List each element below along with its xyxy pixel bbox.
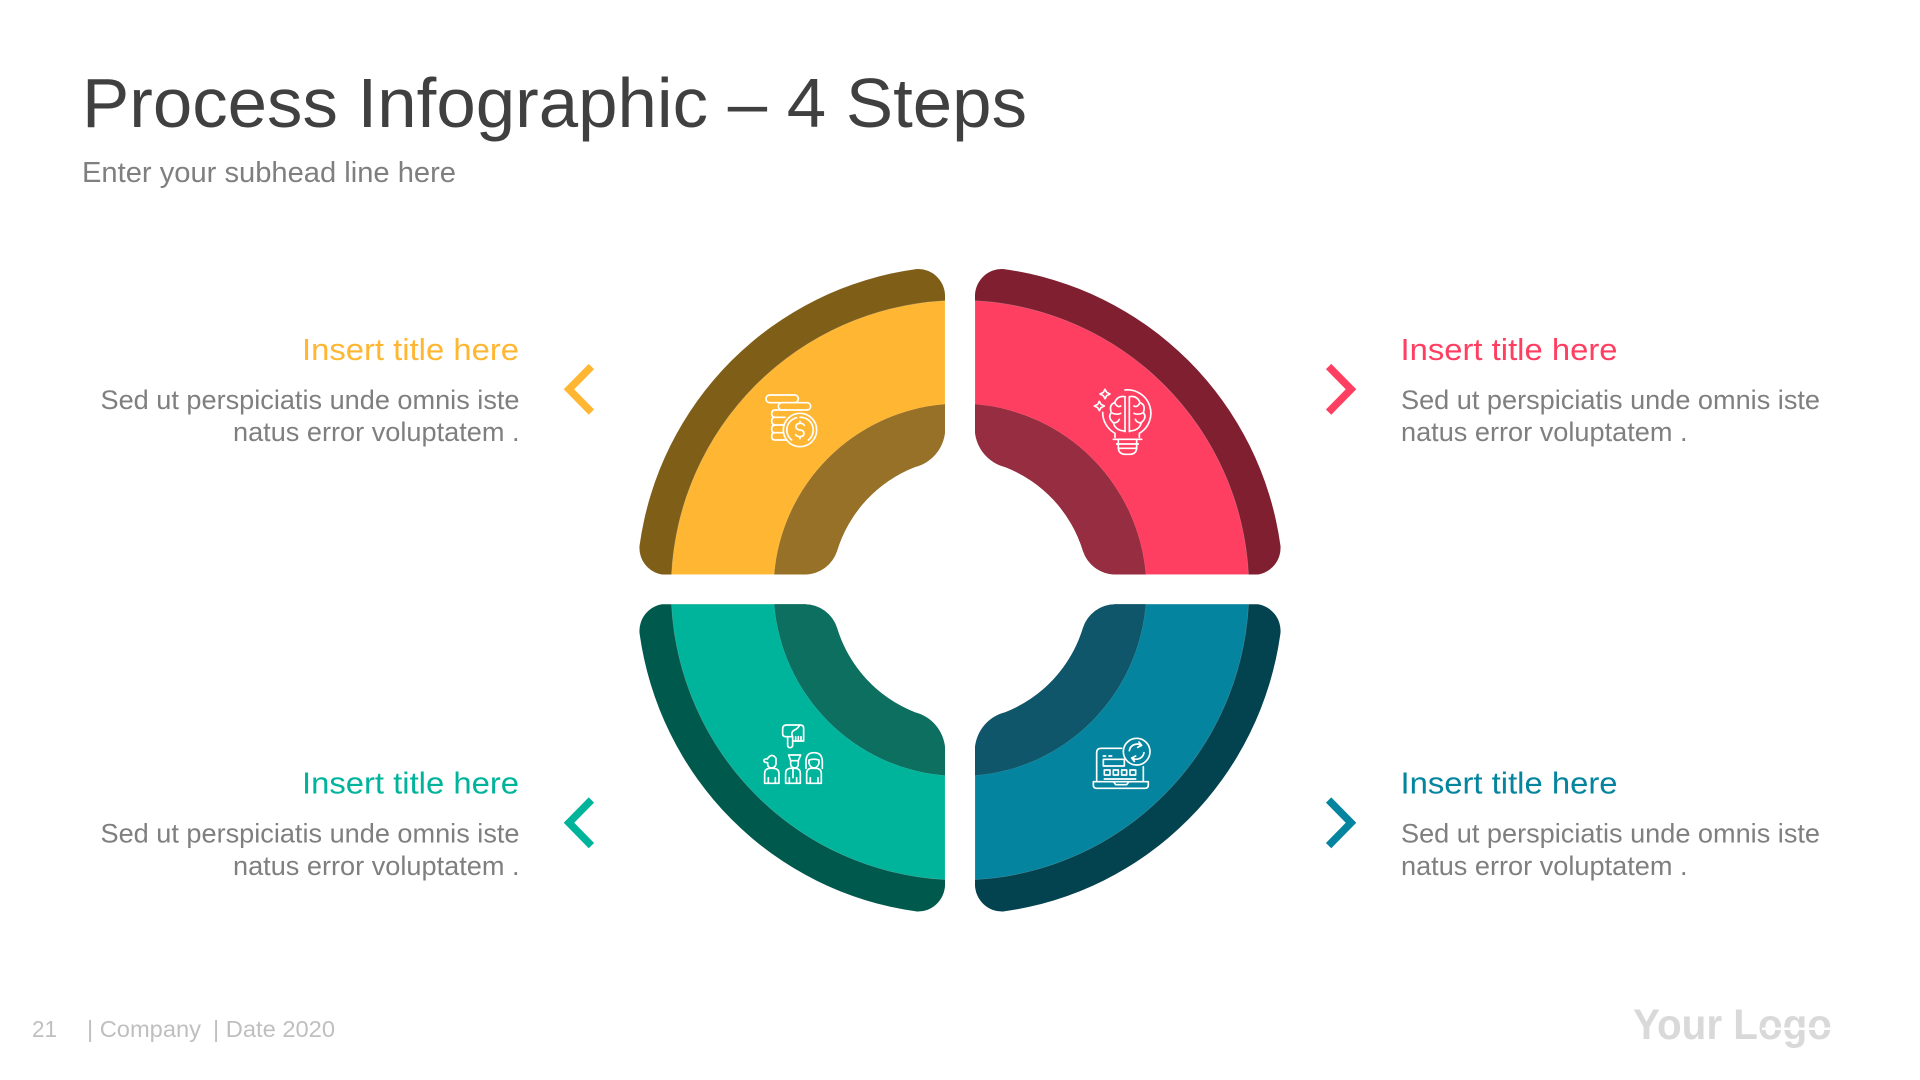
panel: step 2 pink quadrant (975, 269, 1281, 574)
body: step 4: natus error voluptatem . (1401, 851, 1688, 881)
text block: step 4 (1400, 766, 1820, 881)
heading: step 3: Insert title here (302, 766, 519, 800)
footer (32, 1016, 335, 1042)
text block: step 1 (100, 332, 520, 447)
body: step 4 (1401, 819, 1820, 881)
footer: | Company (87, 1016, 202, 1042)
icon: laptop with refresh (1093, 738, 1150, 788)
panel: step 3 teal quadrant (639, 604, 945, 912)
icon: paint roller and people (764, 725, 822, 783)
text block: step 3 (100, 766, 520, 881)
panel: step 4 blue quadrant (975, 604, 1281, 912)
title: Process Infographic – 4 Steps (82, 64, 1027, 142)
logo: Your Logo (1633, 1001, 1832, 1049)
arrow: blue chevron (1329, 800, 1351, 846)
body: step 3: natus error voluptatem . (233, 851, 520, 881)
body: step 1 (100, 385, 520, 447)
body: step 2: Sed ut perspiciatis unde omnis iste (1401, 385, 1820, 415)
body: step 3 (100, 819, 520, 881)
body: step 4: Sed ut perspiciatis unde omnis iste (1401, 819, 1820, 849)
body: step 2: natus error voluptatem . (1401, 417, 1688, 447)
footer: | Date 2020 (213, 1016, 335, 1042)
body: step 1: natus error voluptatem . (233, 417, 520, 447)
body: step 1: Sed ut perspiciatis unde omnis iste (100, 385, 520, 415)
icon: coin stack (766, 395, 817, 447)
body: step 2 (1401, 385, 1820, 447)
arrow: yellow chevron (569, 366, 591, 412)
heading: step 1: Insert title here (302, 332, 519, 367)
arrow: teal chevron (569, 800, 591, 846)
footer: 21 (32, 1016, 57, 1042)
subtitle: Enter your subhead line here (82, 157, 456, 189)
panel: step 1 yellow quadrant (639, 269, 945, 574)
icon: brain light bulb (1094, 389, 1151, 454)
body: step 3: Sed ut perspiciatis unde omnis iste (100, 819, 520, 849)
heading: step 4: Insert title here (1400, 766, 1618, 800)
arrow: pink chevron (1329, 366, 1351, 412)
heading: step 2: Insert title here (1400, 332, 1618, 367)
text block: step 2 (1400, 332, 1820, 447)
